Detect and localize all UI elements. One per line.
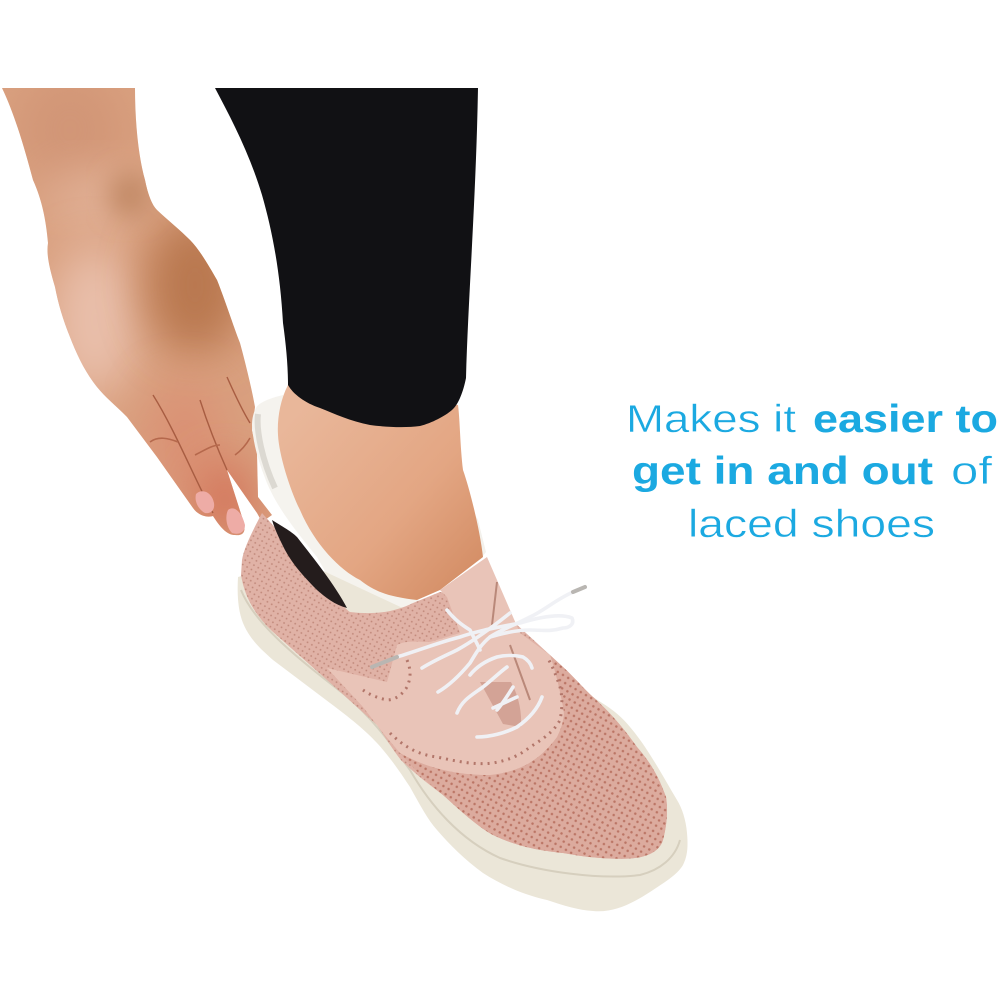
- photo: hand pulling the heel of the shoe: [2, 88, 272, 536]
- knit toe: [400, 655, 667, 859]
- caption line 1: Makes it: [626, 398, 796, 441]
- caption line 1: easier to: [813, 398, 998, 441]
- sock on inner side: [470, 505, 486, 560]
- caption line 1: [626, 398, 998, 441]
- caption line 3: laced shoes: [688, 503, 935, 546]
- suede upper panel: [327, 557, 564, 775]
- fingernails: [196, 491, 245, 534]
- caption line 2: of: [951, 450, 992, 493]
- sole ridge line: [241, 590, 680, 876]
- finger separations: [153, 377, 250, 513]
- shoe inner opening: [272, 520, 347, 608]
- foot and ankle: [278, 385, 483, 600]
- caption: [626, 398, 998, 546]
- shoe sole: [238, 560, 688, 911]
- shoe: [238, 513, 688, 911]
- knuckle creases: [150, 438, 250, 455]
- caption line 2: get in and out: [632, 450, 933, 493]
- elastic laces: [397, 592, 573, 737]
- black leggings: [215, 88, 478, 427]
- forearm and hand: [2, 88, 272, 536]
- white sock cuff: [252, 395, 420, 616]
- lace throat opening: [480, 682, 521, 727]
- shoe upper knit: [241, 513, 667, 859]
- tongue edge: [492, 582, 530, 700]
- sock ribbing shadow: [258, 414, 275, 488]
- lace aglets: [372, 587, 585, 667]
- brogue perforations: [363, 657, 562, 764]
